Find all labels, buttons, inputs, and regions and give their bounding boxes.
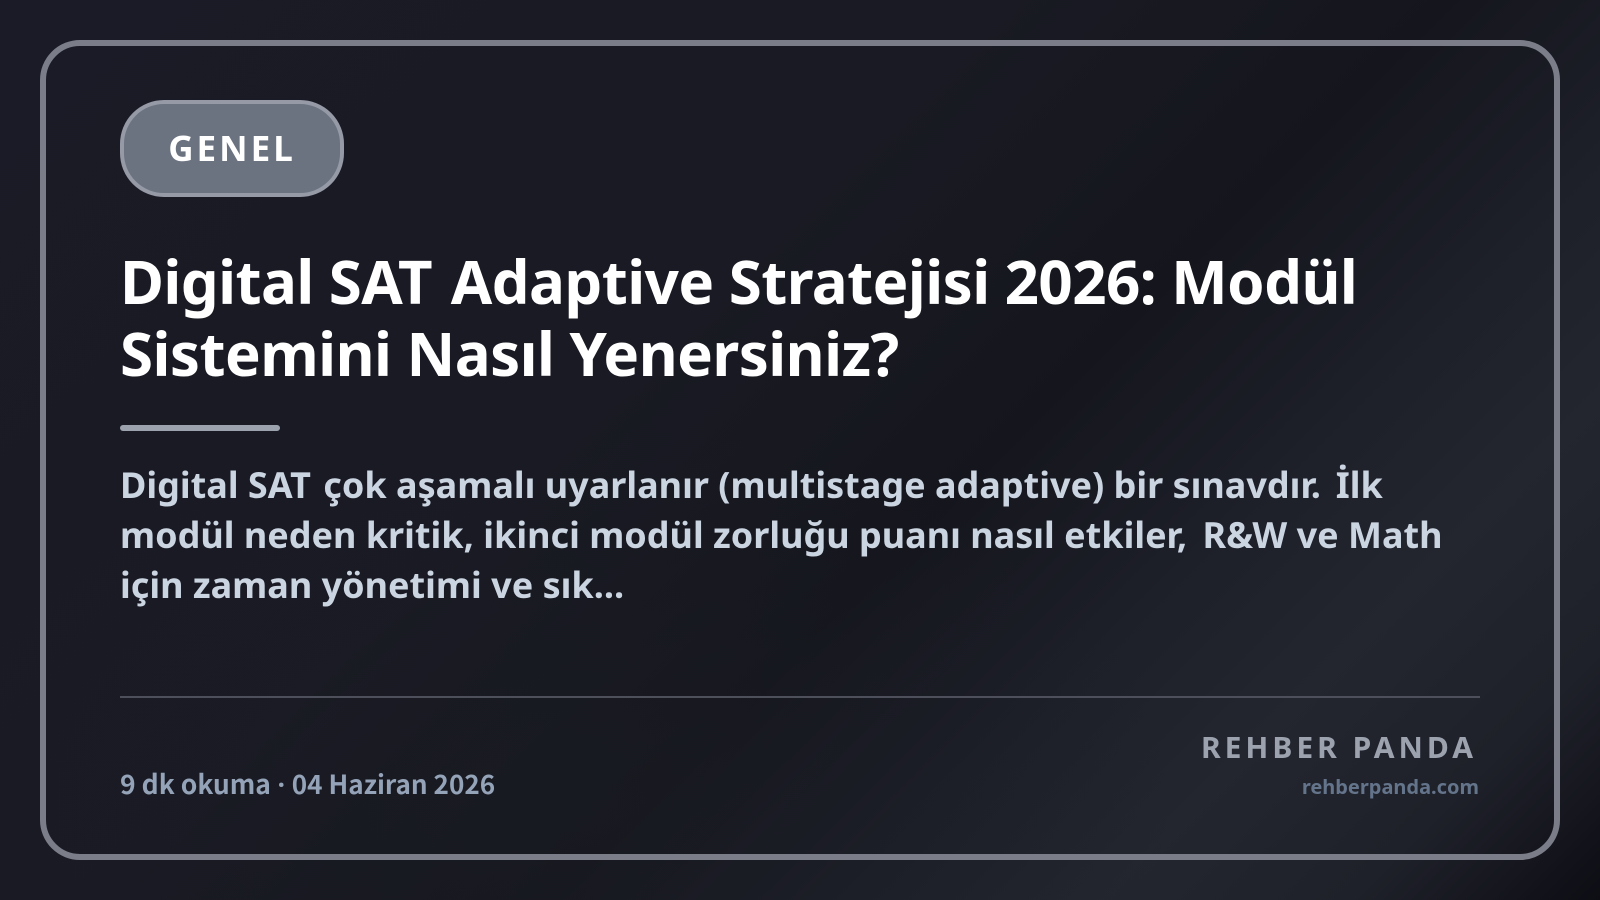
description: için zaman yönetimi ve sık... xyxy=(120,560,624,609)
title: Digital SAT Adaptive Stratejisi 2026: Modül xyxy=(120,240,1357,322)
footer divider xyxy=(120,696,1480,698)
category badge xyxy=(120,100,344,197)
brand name: REHBER PANDA xyxy=(1201,726,1477,767)
description: Digital SAT çok aşamalı uyarlanır (multistage adaptive) bir sınavdır. İlk xyxy=(120,460,1383,509)
title xyxy=(120,240,1357,394)
description xyxy=(120,460,1443,609)
accent rule xyxy=(120,425,280,431)
title: Sistemini Nasıl Yenersiniz? xyxy=(120,312,899,394)
website: rehberpanda.com xyxy=(1302,773,1479,800)
description: modül neden kritik, ikinci modül zorluğu puanı nasıl etkiler, R&W ve Math xyxy=(120,510,1443,559)
badge label: GENEL xyxy=(168,125,296,172)
reading time and date: 9 dk okuma · 04 Haziran 2026 xyxy=(120,763,495,802)
